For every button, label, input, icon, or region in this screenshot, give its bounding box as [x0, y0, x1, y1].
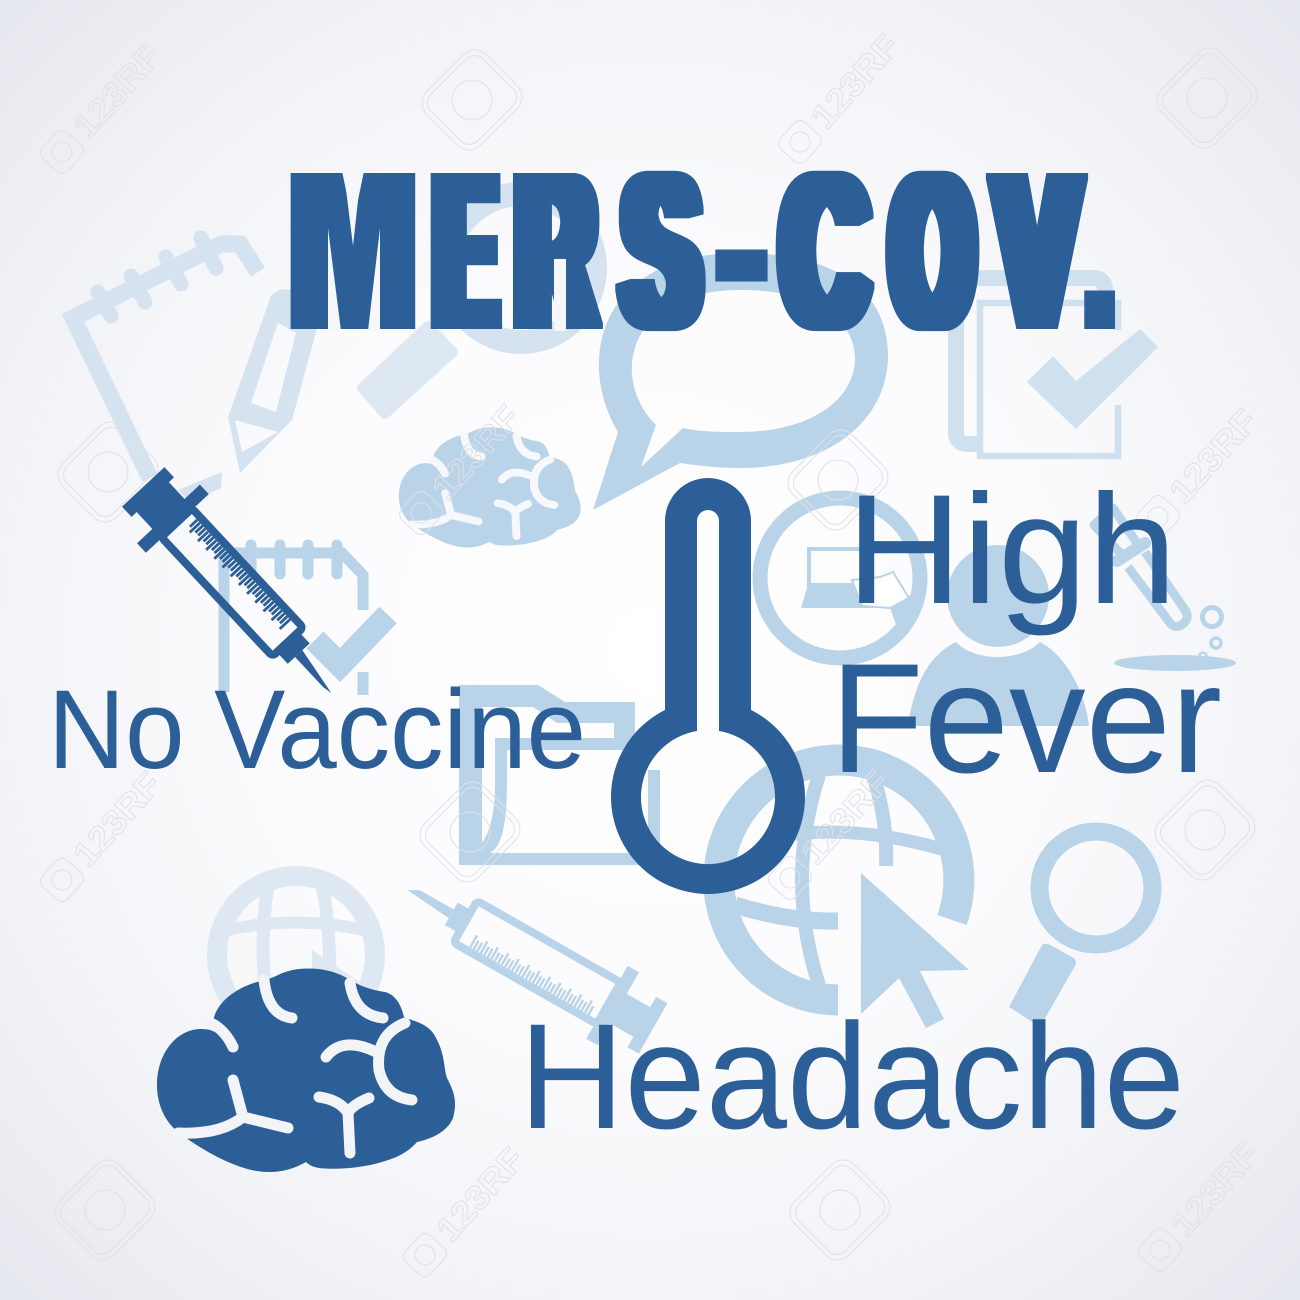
icon: laptop search circle [760, 498, 920, 658]
icon: magnifier handle [362, 326, 453, 414]
icon: thermometer [611, 478, 805, 894]
icon: magnifying glass right [1009, 832, 1152, 1027]
icon: small syringe [387, 853, 674, 1065]
watermarks: 123RF [794, 763, 897, 872]
icon: dark syringe [112, 458, 365, 720]
icon: pencil [228, 289, 322, 473]
title: S [624, 130, 698, 372]
title: M [293, 130, 413, 372]
icon: magnifier lens behind title [447, 194, 595, 342]
icon: checklist top right [956, 278, 1158, 456]
title: - [723, 126, 760, 368]
watermarks: 123RF [429, 1140, 532, 1249]
title: C [783, 130, 865, 372]
icon: large globe [719, 760, 959, 1000]
title: . [1093, 130, 1106, 372]
title: O [893, 130, 971, 372]
watermarks: 123RF [1162, 402, 1265, 511]
watermarks: 123RF [425, 398, 528, 507]
title: R [518, 130, 593, 372]
icon: speech bubble [593, 253, 888, 510]
label: No Vaccine: No Vaccine [48, 667, 586, 792]
icon: small brain [399, 427, 581, 547]
title: V [997, 130, 1077, 372]
label: Fever: Fever [830, 632, 1222, 806]
icon: dropper with bubbles [1094, 508, 1236, 671]
icon: cursor arrow [861, 873, 969, 1028]
icon: person [908, 545, 1089, 726]
watermarks: 123RF [804, 27, 907, 136]
icon: small globe [217, 876, 375, 1034]
icon: notepad with check [224, 545, 388, 695]
watermarks: 123RF [66, 765, 169, 874]
watermarks: 123RF [1164, 1135, 1267, 1244]
icon: notepad top left [73, 238, 258, 502]
icon: dark brain [157, 968, 455, 1172]
label: High: High [846, 463, 1177, 637]
title [290, 126, 1116, 372]
label: Headache: Headache [519, 992, 1185, 1160]
title: E [437, 130, 494, 372]
watermarks: 123RF [66, 37, 169, 146]
icon: folder [459, 685, 660, 865]
